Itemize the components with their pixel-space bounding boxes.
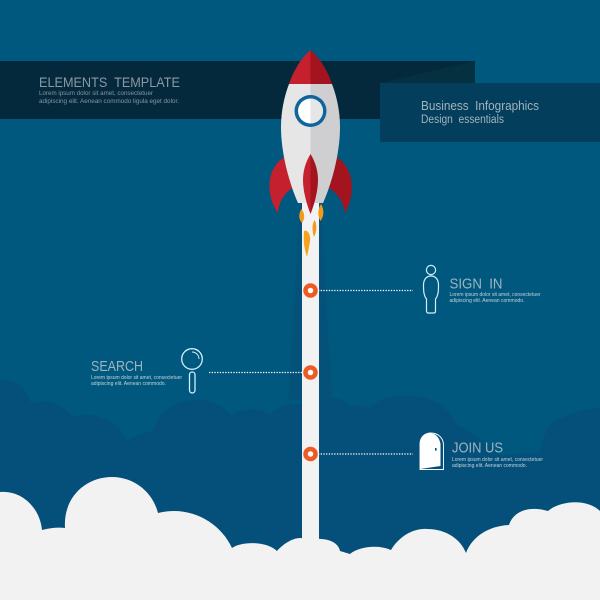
- nose right: [310, 50, 332, 84]
- rocket: [270, 50, 352, 214]
- heading: elements template: adipiscing elit. Aenean commodo ligula eget dolor.: [39, 98, 179, 105]
- sign in text: adipiscing elit. Aenean commodo.: [450, 298, 525, 304]
- join us text: [452, 440, 543, 469]
- body right half: [310, 84, 340, 203]
- heading: elements template: Lorem ipsum dolor sit amet, consectetuer: [39, 90, 154, 97]
- search text: [91, 358, 182, 387]
- sign in text: Lorem ipsum dolor sit amet, consectetuer: [450, 292, 541, 298]
- right fin: [327, 157, 352, 213]
- sign in text: [450, 276, 541, 304]
- heading: business infographics: Business Infographics: [421, 99, 539, 113]
- search text: Lorem ipsum dolor sit amet, consectetuer: [91, 375, 182, 381]
- nose left: [289, 50, 310, 84]
- connector: sign in: [306, 286, 413, 296]
- centre fin right: [310, 154, 318, 214]
- connector: search: [209, 368, 316, 378]
- rocket trail shadow: [288, 205, 332, 400]
- icon: person: [424, 265, 438, 313]
- icon: magnifier: [182, 349, 202, 393]
- exhaust trail: [302, 203, 319, 548]
- join us text: JOIN US: [452, 440, 503, 456]
- heading: elements template: ELEMENTS TEMPLATE: [39, 74, 180, 90]
- join us text: adipiscing elit. Aenean commodo.: [452, 463, 527, 469]
- background clouds: [0, 380, 600, 600]
- connector: join us: [306, 449, 413, 459]
- heading: elements template: [39, 74, 180, 105]
- heading: business infographics: [421, 99, 539, 126]
- join us text: Lorem ipsum dolor sit amet, consectetuer: [452, 457, 543, 463]
- search text: adipiscing elit. Aenean commodo.: [91, 381, 166, 387]
- top right banner: [380, 83, 600, 142]
- front clouds: [0, 477, 600, 600]
- window: [294, 95, 326, 127]
- icon: door: [420, 433, 444, 470]
- left fin: [270, 157, 294, 213]
- sign in text: SIGN IN: [450, 276, 502, 292]
- centre fin left: [303, 154, 310, 214]
- top left banner: [0, 61, 475, 119]
- search text: SEARCH: [91, 358, 143, 375]
- body left half: [281, 84, 310, 203]
- heading: business infographics: Design essentials: [421, 114, 504, 126]
- flames: [299, 204, 323, 257]
